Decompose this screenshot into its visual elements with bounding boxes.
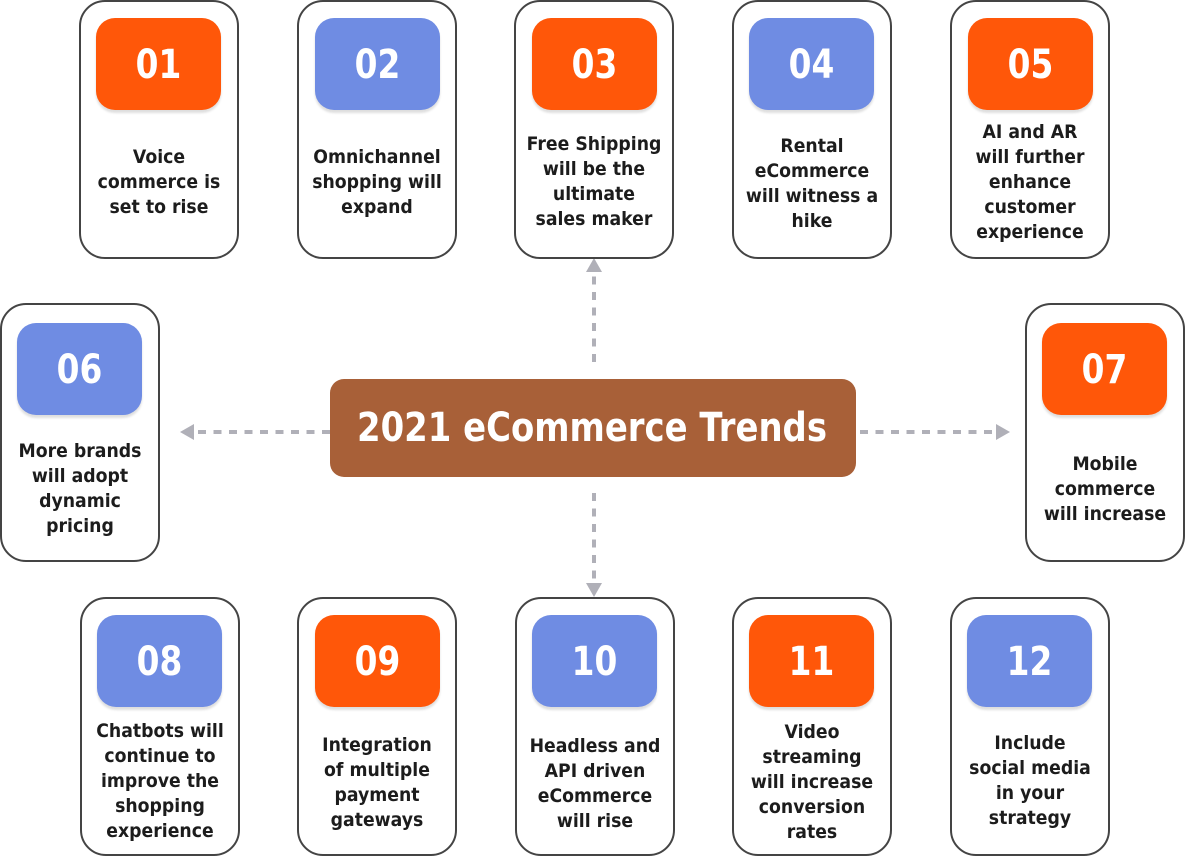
badge 06	[17, 323, 142, 415]
text 03	[527, 132, 661, 230]
text 11: streaming	[762, 746, 862, 768]
badge 01: 01	[136, 42, 181, 88]
text 05: experience	[976, 220, 1084, 242]
badge 10	[532, 615, 657, 707]
text 10: API driven	[545, 760, 645, 782]
arrow: right to card 07	[860, 424, 1010, 440]
text 09: of multiple	[324, 758, 430, 780]
text 02: expand	[341, 196, 413, 218]
card 05	[950, 0, 1110, 259]
text 03: ultimate	[553, 182, 635, 204]
text 09: gateways	[331, 808, 423, 830]
card 02	[297, 0, 457, 259]
text 03: sales maker	[536, 208, 652, 230]
arrow: left to card 06	[180, 424, 330, 440]
badge 08	[97, 615, 222, 707]
badge 03: 03	[572, 42, 617, 88]
text 08: experience	[106, 820, 214, 842]
text 05: AI and AR	[983, 120, 1077, 142]
badge 08: 08	[137, 639, 182, 685]
central title: 2021 eCommerce Trends	[357, 405, 827, 451]
badge 11	[749, 615, 874, 707]
badge 01	[96, 18, 221, 110]
card 03	[514, 0, 674, 259]
text 10: Headless and	[530, 734, 660, 756]
text 02: Omnichannel	[313, 146, 441, 168]
text 08: improve the	[101, 770, 219, 792]
text 07: will increase	[1044, 502, 1166, 524]
badge 02	[315, 18, 440, 110]
text 01: set to rise	[110, 196, 208, 218]
text 11	[751, 720, 873, 842]
text 11: rates	[787, 820, 837, 842]
card 06	[0, 303, 160, 562]
badge 12	[967, 615, 1092, 707]
text 11: conversion	[759, 796, 865, 818]
text 04: will witness a	[746, 184, 878, 206]
card 12	[950, 597, 1110, 856]
badge 12: 12	[1007, 639, 1052, 685]
text 02	[312, 146, 442, 218]
badge 06: 06	[57, 347, 102, 393]
text 09: Integration	[322, 734, 432, 756]
text 05: will further	[976, 146, 1084, 168]
card 10	[515, 597, 675, 856]
card 08	[80, 597, 240, 856]
text 08: Chatbots will	[96, 720, 224, 742]
text 06: pricing	[46, 514, 114, 536]
text 12: Include	[994, 732, 1066, 754]
text 12: social media	[969, 756, 1091, 778]
central title	[330, 379, 856, 477]
text 07: Mobile	[1072, 452, 1138, 474]
card 11	[732, 597, 892, 856]
badge 09	[315, 615, 440, 707]
text 04: Rental	[780, 134, 844, 156]
badge 03	[532, 18, 657, 110]
text 05: customer	[984, 196, 1076, 218]
text 10	[530, 734, 660, 832]
text 06: will adopt	[32, 464, 128, 486]
text 12: in your	[996, 782, 1064, 804]
text 10: will rise	[557, 810, 633, 832]
text 12: strategy	[989, 806, 1071, 828]
badge 04: 04	[789, 42, 834, 88]
text 08: continue to	[104, 744, 216, 766]
text 01	[98, 146, 220, 218]
text 01: commerce is	[98, 170, 220, 192]
text 12	[969, 732, 1091, 828]
text 07	[1044, 452, 1166, 524]
text 10: eCommerce	[538, 784, 652, 806]
text 05	[976, 120, 1084, 242]
text 08	[96, 720, 224, 842]
text 09: payment	[334, 784, 420, 806]
text 11: will increase	[751, 770, 873, 792]
badge 10: 10	[572, 639, 617, 685]
badge 11: 11	[789, 639, 834, 685]
arrow: down to card 10	[586, 493, 602, 597]
text 11: Video	[785, 720, 839, 742]
text 04: eCommerce	[755, 160, 869, 182]
text 09	[322, 734, 432, 830]
text 05: enhance	[989, 170, 1071, 192]
badge 07	[1042, 323, 1167, 415]
text 02: shopping will	[312, 170, 442, 192]
text 06: dynamic	[39, 490, 121, 512]
badge 07: 07	[1082, 347, 1127, 393]
badge 04	[749, 18, 874, 110]
card 01	[79, 0, 239, 259]
arrow: up to card 03	[586, 259, 602, 362]
text 06: More brands	[19, 440, 141, 462]
text 03: Free Shipping	[527, 132, 661, 154]
text 06	[19, 440, 141, 536]
badge 05: 05	[1008, 42, 1053, 88]
badge 05	[968, 18, 1093, 110]
text 04	[746, 134, 878, 232]
card 07	[1025, 303, 1185, 562]
badge 02: 02	[355, 42, 400, 88]
card 09	[297, 597, 457, 856]
text 03: will be the	[543, 158, 645, 180]
badge 09: 09	[355, 639, 400, 685]
text 07: commerce	[1055, 478, 1155, 500]
text 04: hike	[791, 210, 833, 232]
text 08: shopping	[115, 794, 205, 816]
text 01: Voice	[133, 146, 185, 168]
card 04	[732, 0, 892, 259]
